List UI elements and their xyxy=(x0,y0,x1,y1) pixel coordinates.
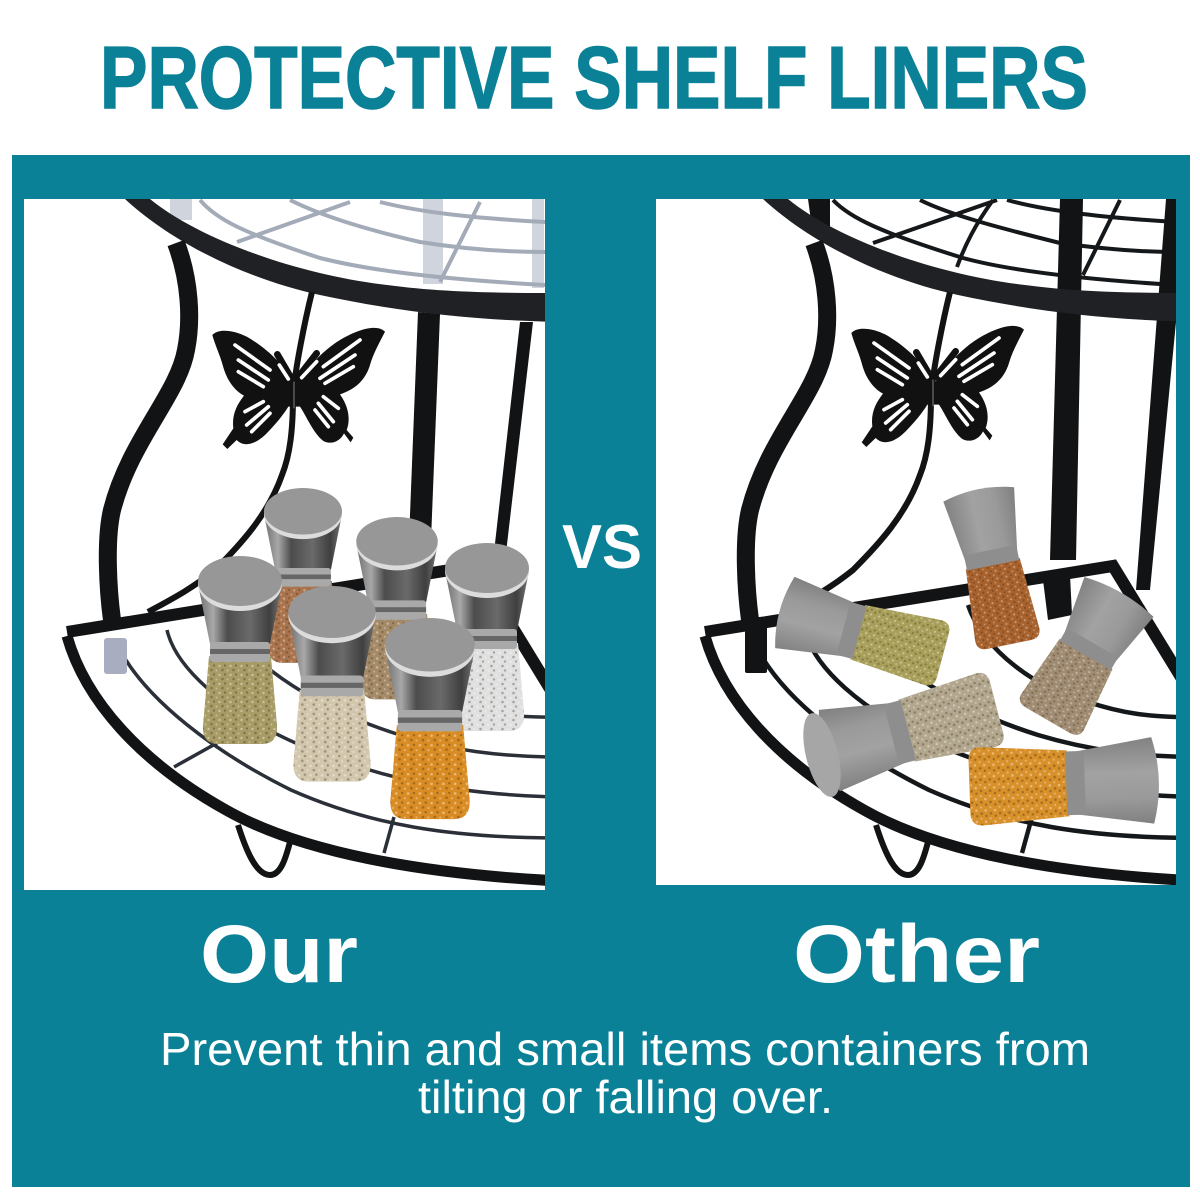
rear posts xyxy=(409,312,533,570)
shelf frame xyxy=(67,199,560,881)
tipped spice jars xyxy=(770,482,1160,830)
lower shelf wire grid xyxy=(762,605,1198,853)
rear posts xyxy=(808,199,1176,620)
bare foot post xyxy=(745,617,767,673)
liner-covered foot xyxy=(104,638,127,674)
caption xyxy=(160,1023,1090,1123)
VS label: VS xyxy=(562,513,642,582)
butterfly xyxy=(851,326,1024,447)
butterfly xyxy=(212,328,385,449)
caption: Prevent thin and small items containers from xyxy=(160,1023,1090,1075)
label: Other: Other xyxy=(793,909,1040,1000)
panel: other shelf photo xyxy=(656,199,1198,885)
shelf frame xyxy=(705,199,1198,881)
caption: tilting or falling over. xyxy=(418,1071,833,1123)
top shelf bare wires xyxy=(833,200,1176,285)
label: Our: Our xyxy=(200,909,358,1000)
top shelf with clear liner xyxy=(170,199,545,288)
spice jars xyxy=(198,488,529,819)
lower shelf wire grid with liner xyxy=(127,630,545,854)
panel: our shelf photo xyxy=(24,199,560,890)
